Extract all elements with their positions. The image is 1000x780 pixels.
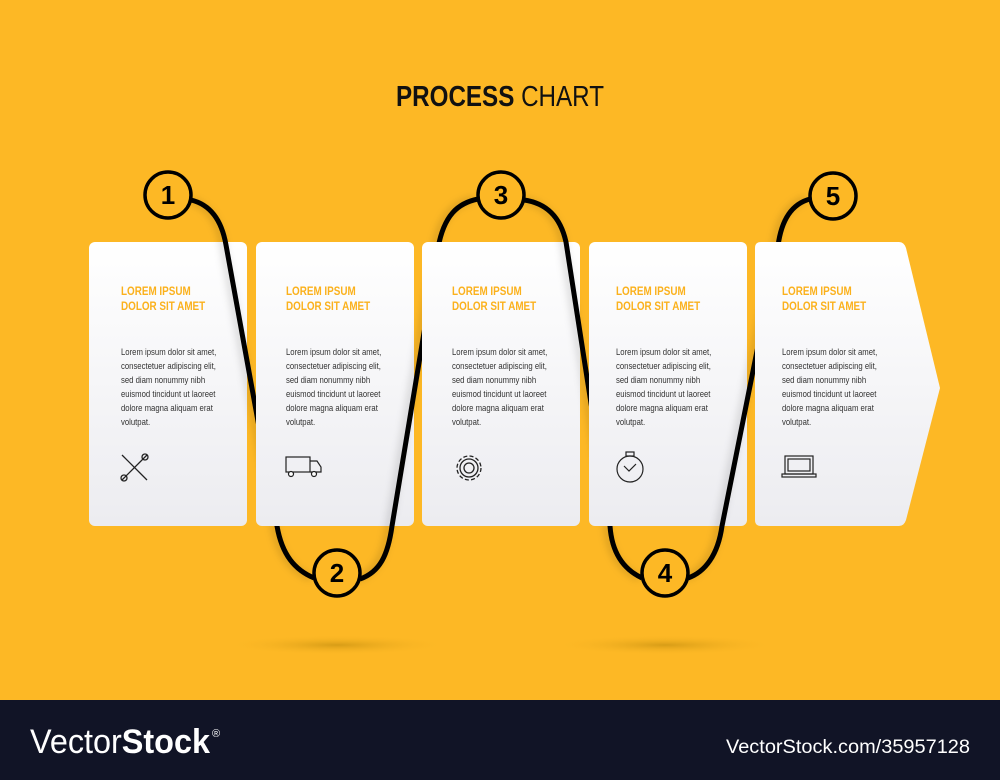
icon: laptop bbox=[782, 456, 816, 477]
card 5 arrow: sed diam nonummy nibh bbox=[782, 374, 866, 385]
card 5 arrow: DOLOR SIT AMET bbox=[782, 300, 867, 313]
card 3: sed diam nonummy nibh bbox=[452, 374, 536, 385]
card 4: sed diam nonummy nibh bbox=[616, 374, 700, 385]
card 4: LOREM IPSUM bbox=[616, 285, 686, 298]
connector 3-4 bbox=[524, 200, 642, 578]
card 2: sed diam nonummy nibh bbox=[286, 374, 370, 385]
card 1 bbox=[89, 242, 247, 526]
card 4: Lorem ipsum dolor sit amet, bbox=[616, 346, 711, 357]
card 2: dolore magna aliquam erat bbox=[286, 402, 378, 413]
card 3: dolore magna aliquam erat bbox=[452, 402, 544, 413]
card 3: LOREM IPSUM bbox=[452, 285, 522, 298]
step circles: 5 bbox=[826, 181, 840, 211]
card 1: consectetuer adipiscing elit, bbox=[121, 360, 216, 371]
step circles: 4 bbox=[658, 558, 673, 588]
card 2: LOREM IPSUM bbox=[286, 285, 356, 298]
card 2: DOLOR SIT AMET bbox=[286, 300, 371, 313]
card 5 arrow bbox=[755, 242, 940, 526]
card 1: LOREM IPSUM bbox=[121, 285, 191, 298]
card 5 arrow: euismod tincidunt ut laoreet bbox=[782, 388, 877, 399]
card 2: euismod tincidunt ut laoreet bbox=[286, 388, 381, 399]
card 4: euismod tincidunt ut laoreet bbox=[616, 388, 711, 399]
card 1: Lorem ipsum dolor sit amet, bbox=[121, 346, 216, 357]
step circles: 2 bbox=[330, 558, 344, 588]
footer bar: ® bbox=[212, 728, 220, 740]
floor shadows bbox=[227, 635, 775, 655]
step circles bbox=[145, 172, 856, 596]
card 5 arrow: Lorem ipsum dolor sit amet, bbox=[782, 346, 877, 357]
card 1: dolore magna aliquam erat bbox=[121, 402, 213, 413]
card 3: euismod tincidunt ut laoreet bbox=[452, 388, 547, 399]
card 1: volutpat. bbox=[121, 416, 150, 427]
step circles: 3 bbox=[494, 180, 508, 210]
step circles: 1 bbox=[161, 180, 175, 210]
footer bar: VectorStock bbox=[30, 723, 210, 761]
card 4: dolore magna aliquam erat bbox=[616, 402, 708, 413]
card 4: volutpat. bbox=[616, 416, 645, 427]
card 3: volutpat. bbox=[452, 416, 481, 427]
card 3: consectetuer adipiscing elit, bbox=[452, 360, 547, 371]
card 1: euismod tincidunt ut laoreet bbox=[121, 388, 216, 399]
footer bar bbox=[0, 700, 1000, 780]
card 5 arrow: dolore magna aliquam erat bbox=[782, 402, 874, 413]
card 5 arrow: LOREM IPSUM bbox=[782, 285, 852, 298]
card 3 bbox=[422, 242, 580, 526]
card 4: consectetuer adipiscing elit, bbox=[616, 360, 711, 371]
icon: truck bbox=[286, 457, 321, 476]
card 3: Lorem ipsum dolor sit amet, bbox=[452, 346, 547, 357]
icon: gear bbox=[457, 456, 481, 480]
card 1: DOLOR SIT AMET bbox=[121, 300, 206, 313]
card 2: volutpat. bbox=[286, 416, 315, 427]
connector 4-5 bbox=[688, 199, 810, 578]
footer bar: VectorStock.com/35957128 bbox=[726, 737, 970, 758]
card 5 arrow: consectetuer adipiscing elit, bbox=[782, 360, 877, 371]
connector 2-3 bbox=[360, 199, 478, 579]
connector 1-2 bbox=[191, 200, 314, 578]
card 4: DOLOR SIT AMET bbox=[616, 300, 701, 313]
icon: stopwatch bbox=[617, 452, 643, 482]
card 4 bbox=[589, 242, 747, 526]
icon: tools bbox=[121, 454, 148, 481]
card 5 arrow: volutpat. bbox=[782, 416, 811, 427]
card 3: DOLOR SIT AMET bbox=[452, 300, 537, 313]
card 2 bbox=[256, 242, 414, 526]
card 1: sed diam nonummy nibh bbox=[121, 374, 205, 385]
title: PROCESS CHART bbox=[396, 81, 604, 113]
card 2: consectetuer adipiscing elit, bbox=[286, 360, 381, 371]
card 2: Lorem ipsum dolor sit amet, bbox=[286, 346, 381, 357]
